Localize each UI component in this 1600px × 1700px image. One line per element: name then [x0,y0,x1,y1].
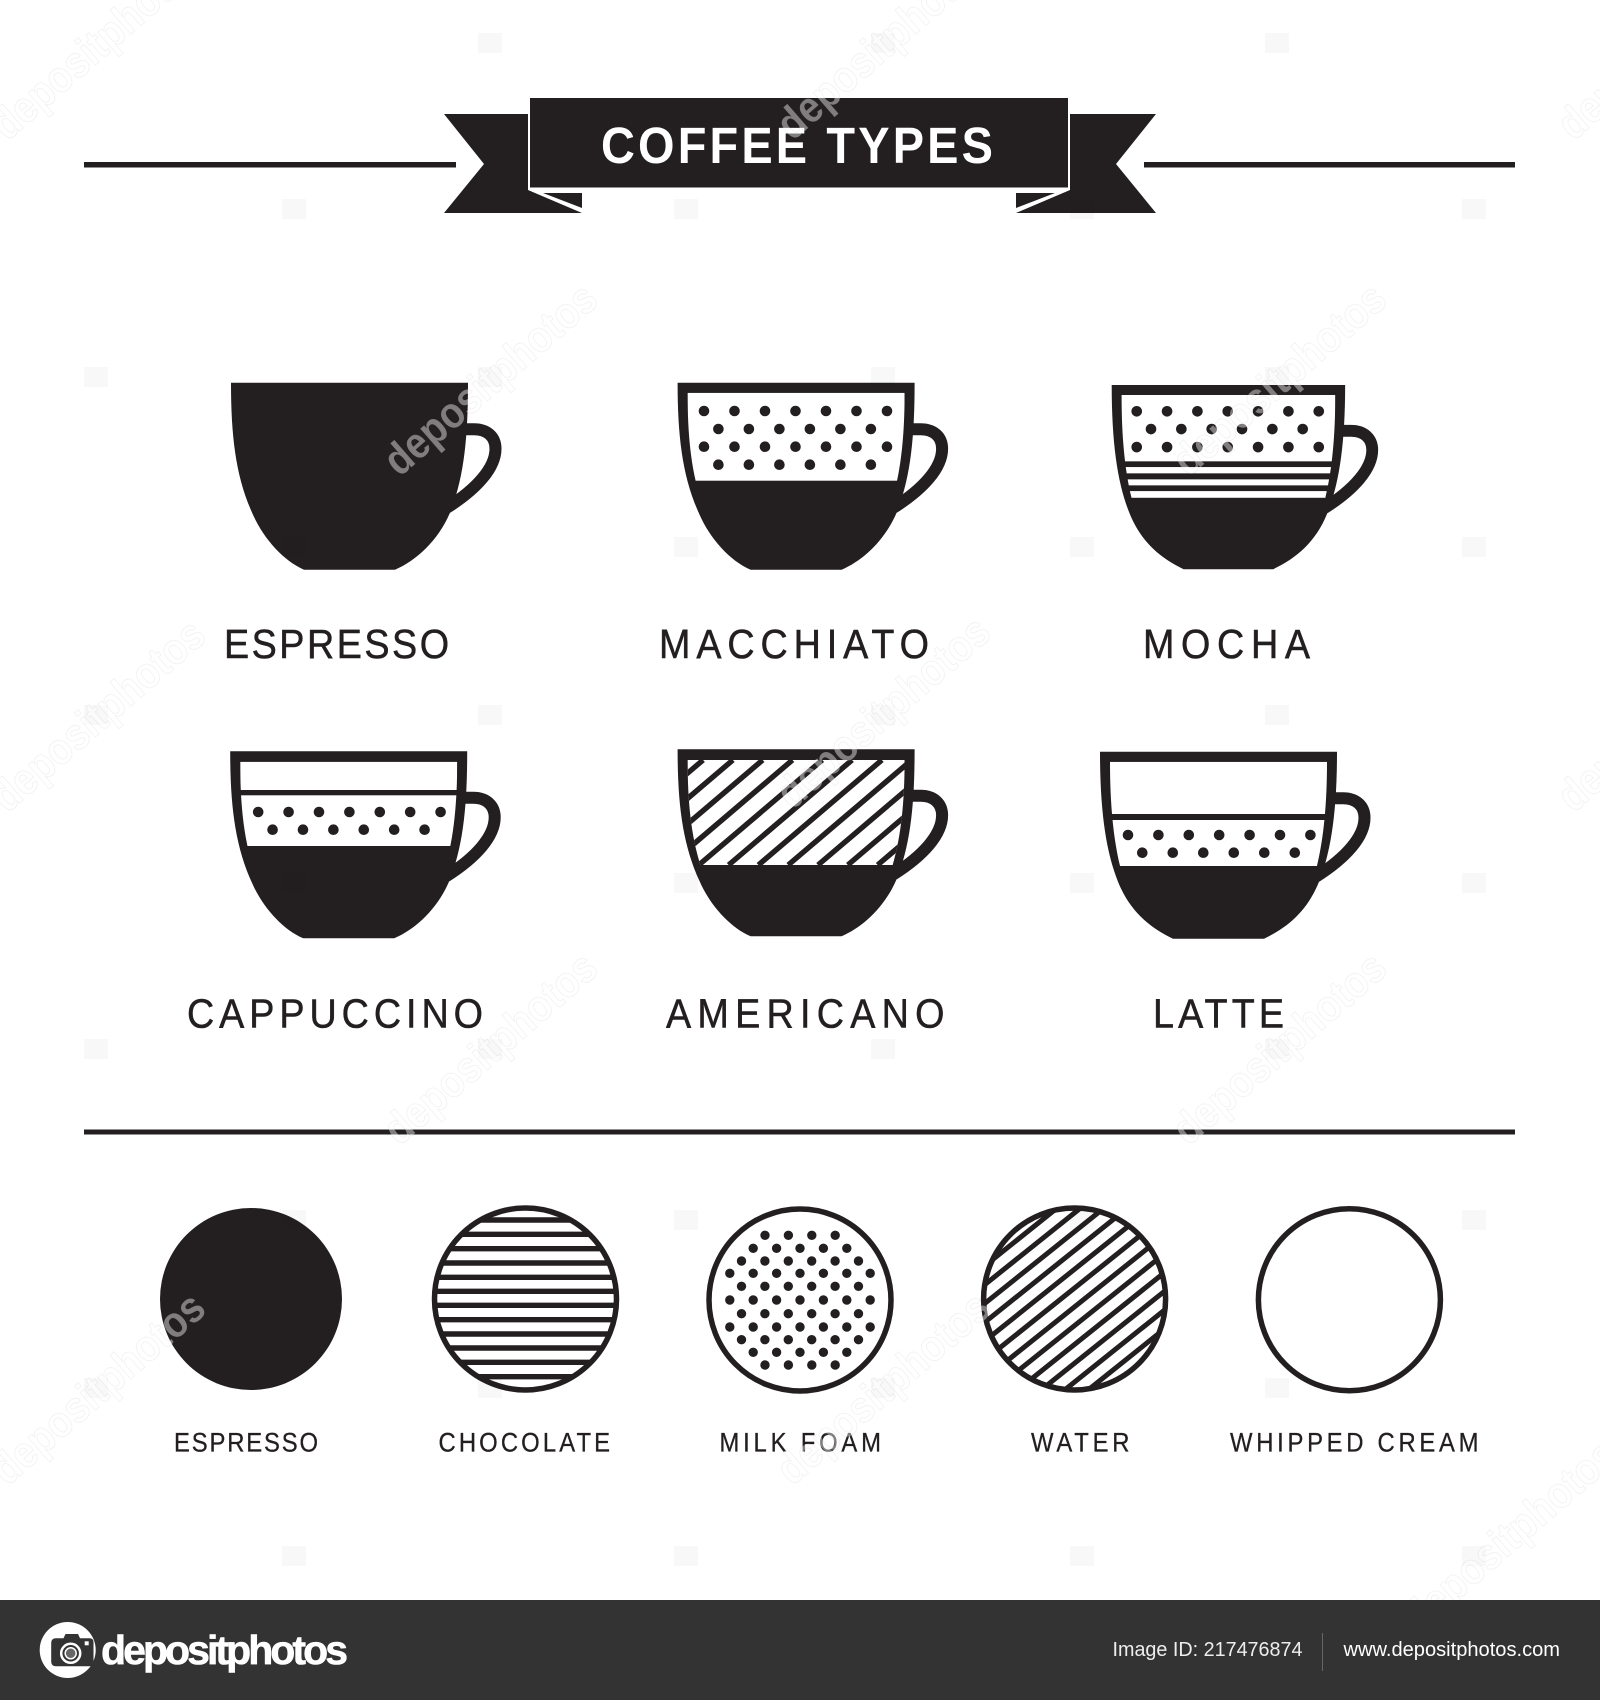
label: espresso key: ESPRESSO [174,1428,318,1458]
legend: espresso [160,1208,342,1458]
watermark: repeated stock logo overlay: depositphotos [767,607,1000,818]
website url: www.depositphotos.com [1342,1639,1560,1661]
ribbon tail left [444,114,582,213]
title: COFFEE TYPES [601,118,993,174]
icon: latte cup [1100,752,1364,939]
icon: macchiato cup [678,383,942,570]
ribbon body [530,98,1068,188]
icon: americano cup [678,749,948,936]
label: milk foam key: MILK FOAM [720,1428,881,1458]
watermark: repeated stock logo overlay: depositphotos [374,274,607,485]
watermark: repeated stock logo overlay: depositphotos [767,1283,1000,1494]
panel: latte cup [1100,752,1364,1037]
icon: camera logo [40,1622,96,1678]
watermark: repeated stock logo overlay: depositphotos [1163,943,1396,1154]
watermark: repeated stock logo overlay: depositphotos [1163,274,1396,485]
panel: espresso cup [224,383,496,667]
title banner [84,98,1515,213]
label: water key: WATER [1031,1428,1129,1458]
header rule left [84,162,456,168]
legend: chocolate [430,1208,620,1458]
image id: Image ID: 217476874 [1112,1639,1302,1661]
legend: water [980,1205,1168,1452]
label: chocolate key: CHOCOLATE [438,1428,610,1458]
swatch: whipped cream [1258,1209,1440,1391]
swatch: milk foam dots [709,1209,891,1391]
ribbon tail right [1016,114,1156,213]
label: latte: LATTE [1153,991,1284,1037]
icon: cappuccino cup [230,751,495,938]
icon: mocha cup [1112,385,1372,569]
legend: whipped cream [1230,1209,1478,1458]
label: macchiato: MACCHIATO [659,622,929,667]
panel: americano cup [666,749,948,1028]
legend: milk foam [709,1209,891,1458]
label: whipped cream key: WHIPPED CREAM [1230,1428,1478,1458]
icon: espresso cup [231,383,496,570]
label: espresso: ESPRESSO [224,622,449,667]
watermark: repeated stock logo overlay: depositphotos [374,943,607,1154]
panel: macchiato cup [659,383,942,667]
panel: cappuccino cup [187,751,495,1037]
swatch: water diagonal stripes [980,1205,1168,1393]
footer bar [0,1600,1600,1700]
swatch: espresso [160,1208,342,1390]
header rule right [1144,162,1515,168]
label: cappuccino: CAPPUCCINO [187,991,483,1037]
swatch: chocolate stripes [430,1208,620,1390]
logo wordmark: depositphotos [101,1627,348,1673]
panel: mocha cup [1112,385,1372,667]
label: mocha: MOCHA [1143,622,1311,667]
label: americano: AMERICANO [666,991,944,1037]
